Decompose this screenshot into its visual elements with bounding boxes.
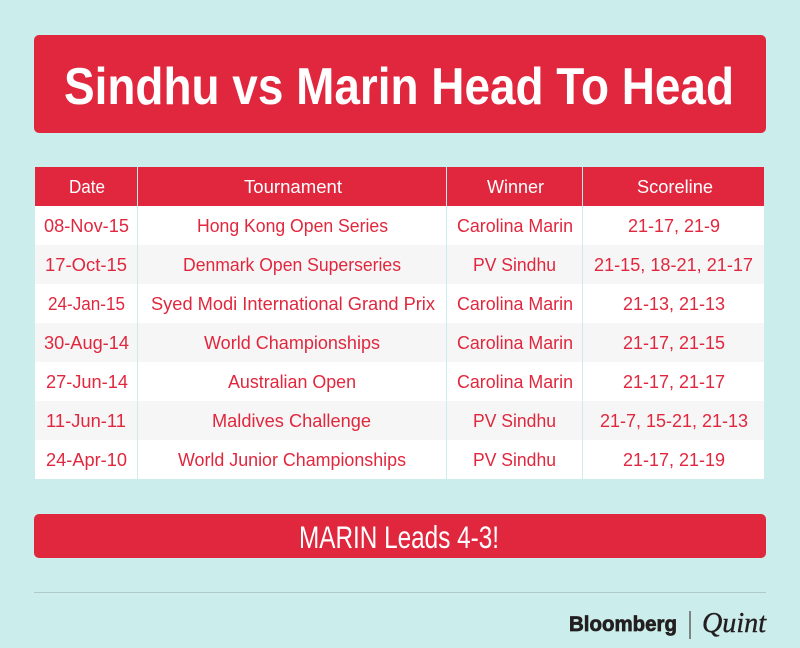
row: 24-Jan-15: Syed Modi International Grand Prix xyxy=(151,293,436,314)
row: 24-Apr-10 xyxy=(46,449,725,470)
row: 17-Oct-15: 17-Oct-15 xyxy=(45,254,127,275)
table header: Tournament xyxy=(244,176,342,197)
result text: MARIN Leads 4-3! xyxy=(299,519,499,555)
row: 30-Aug-14: 21-17, 21-15 xyxy=(623,332,725,353)
result banner xyxy=(34,514,766,558)
row: 17-Oct-15: 21-15, 18-21, 21-17 xyxy=(594,254,753,275)
row: 30-Aug-14: 30-Aug-14 xyxy=(44,332,129,353)
row: 17-Oct-15 xyxy=(45,254,753,275)
row: 11-Jun-11: 21-7, 15-21, 21-13 xyxy=(600,410,748,431)
table header: Scoreline xyxy=(637,176,713,197)
row: 24-Apr-10: PV Sindhu xyxy=(473,449,556,470)
table header: Winner xyxy=(487,176,544,197)
table header: Date xyxy=(69,176,105,197)
logo: Bloomberg Quint xyxy=(569,607,767,639)
row: 24-Apr-10: 21-17, 21-19 xyxy=(623,449,725,470)
row: 11-Jun-11: 11-Jun-11 xyxy=(46,410,126,431)
row: 08-Nov-15: Hong Kong Open Series xyxy=(197,215,388,236)
table: head to head results xyxy=(35,167,764,479)
row: 24-Jan-15: 24-Jan-15 xyxy=(48,293,125,314)
logo: Bloomberg Quint: Quint xyxy=(702,607,767,639)
row: 24-Apr-10: 24-Apr-10 xyxy=(46,449,127,470)
row: 24-Apr-10: World Junior Championships xyxy=(178,449,406,470)
row: 30-Aug-14: World Championships xyxy=(204,332,380,353)
row: 27-Jun-14: 27-Jun-14 xyxy=(46,371,128,392)
row: 27-Jun-14: Carolina Marin xyxy=(457,371,573,392)
logo: Bloomberg Quint: Bloomberg xyxy=(569,613,677,636)
row: 30-Aug-14 xyxy=(44,332,725,353)
row: 24-Jan-15: Carolina Marin xyxy=(457,293,573,314)
row: 17-Oct-15: Denmark Open Superseries xyxy=(183,254,401,275)
row: 08-Nov-15: 08-Nov-15 xyxy=(44,215,129,236)
row: 11-Jun-11: PV Sindhu xyxy=(473,410,556,431)
row: 30-Aug-14: Carolina Marin xyxy=(457,332,573,353)
row: 08-Nov-15 xyxy=(44,215,720,236)
row: 27-Jun-14: 21-17, 21-17 xyxy=(623,371,725,392)
row: 24-Jan-15 xyxy=(48,293,725,314)
title banner xyxy=(34,35,766,133)
row: 11-Jun-11: Maldives Challenge xyxy=(212,410,371,431)
row: 08-Nov-15: Carolina Marin xyxy=(457,215,573,236)
row: 27-Jun-14 xyxy=(46,371,725,392)
row: 24-Jan-15: 21-13, 21-13 xyxy=(623,293,725,314)
row: 08-Nov-15: 21-17, 21-9 xyxy=(628,215,720,236)
row: 11-Jun-11 xyxy=(46,410,748,431)
table header xyxy=(69,176,713,197)
row: 27-Jun-14: Australian Open xyxy=(228,371,356,392)
row: 17-Oct-15: PV Sindhu xyxy=(473,254,556,275)
